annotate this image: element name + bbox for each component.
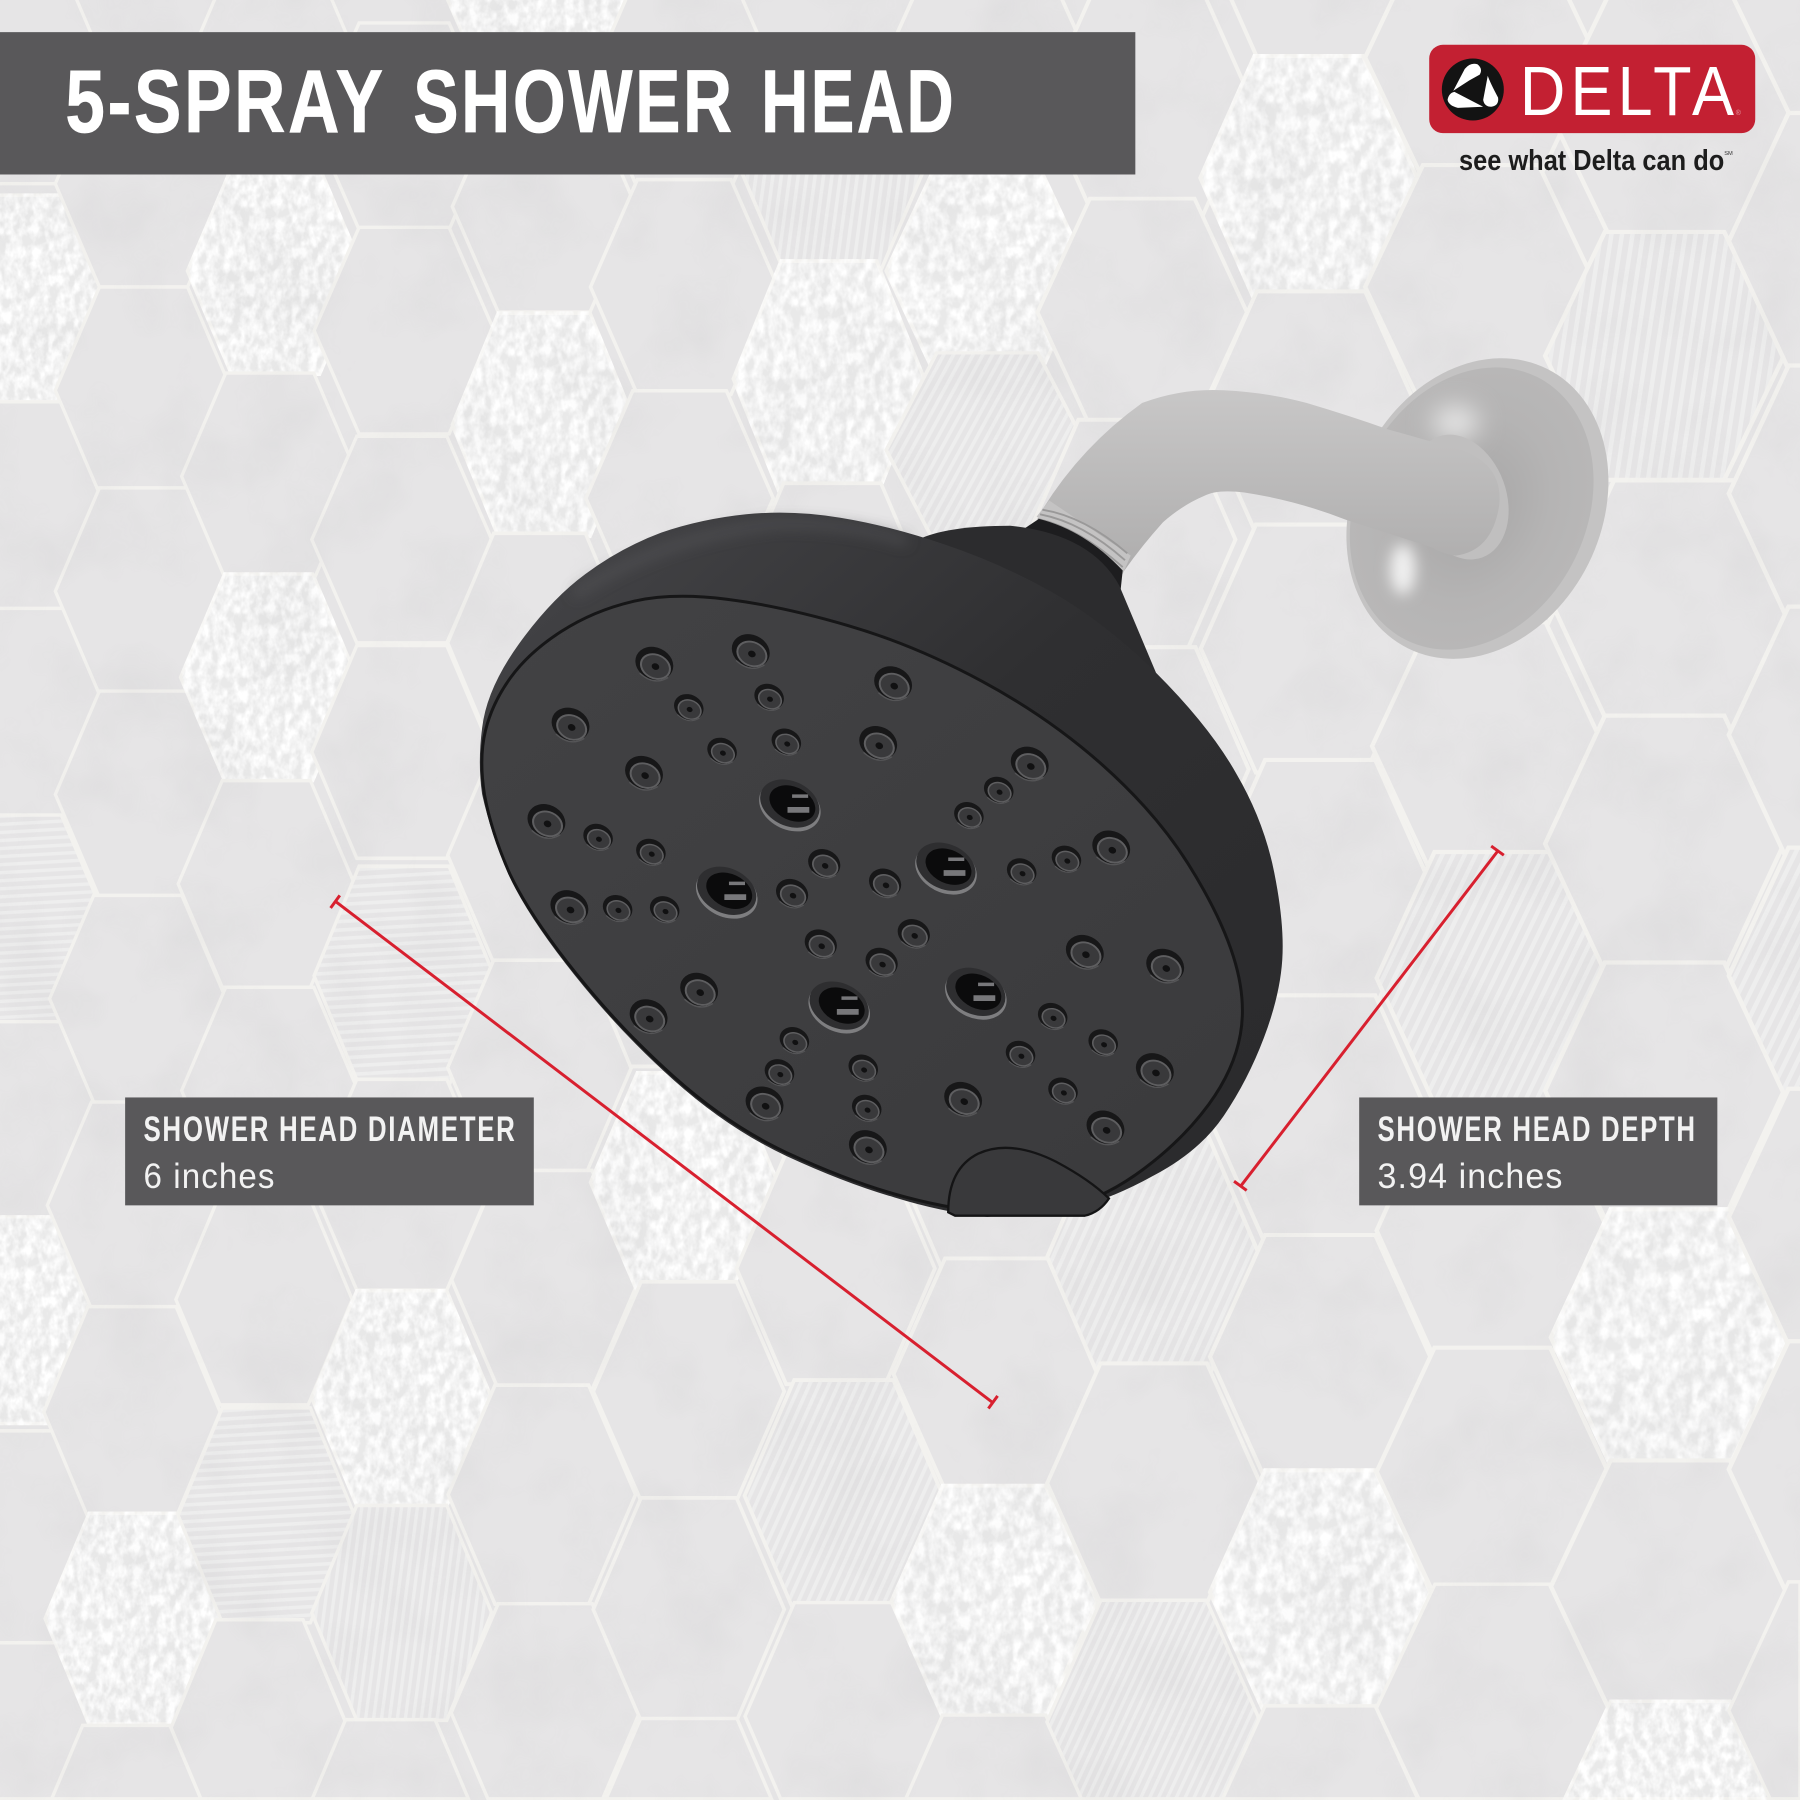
small spray nozzles (579, 679, 1122, 1126)
label: shower head depth: 3.94 inches (1378, 1156, 1564, 1196)
large spray nozzles (522, 628, 1190, 1170)
dimension line: diameter (331, 895, 998, 1409)
threaded arm end (1037, 501, 1131, 574)
dimension line: depth (1234, 846, 1504, 1190)
Delta logo: see what Delta can do (1459, 145, 1724, 177)
wall flange (1297, 314, 1658, 704)
label: shower head diameter: 6 inches (143, 1156, 276, 1196)
label: shower head depth (1359, 1097, 1717, 1205)
spray selector tab (948, 1148, 1109, 1216)
shower arm (1042, 390, 1500, 573)
Delta logo: DELTA (1520, 52, 1739, 130)
label: shower head diameter (125, 1097, 534, 1205)
Delta logo: SM (1724, 151, 1733, 157)
title banner (0, 32, 1135, 174)
shower head body (480, 513, 1283, 1217)
label: shower head diameter: SHOWER HEAD DIAMETER (143, 1109, 517, 1149)
Delta logo (1429, 45, 1755, 177)
title banner: SHOWER (413, 51, 735, 151)
title banner: 5-SPRAY (65, 51, 386, 151)
title banner: HEAD (761, 51, 956, 151)
large central spray openings (688, 770, 1015, 1043)
Delta logo: ® (1736, 109, 1741, 117)
spray face plate (482, 596, 1242, 1216)
